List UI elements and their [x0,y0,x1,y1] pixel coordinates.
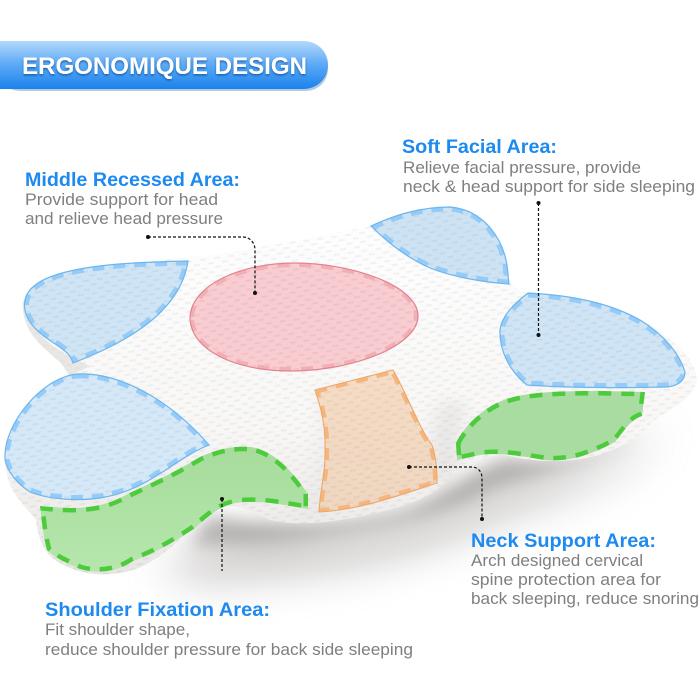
leader: shoulder fixation [220,497,224,571]
blue area: upper left wing [24,261,188,363]
blue area: soft facial right [500,293,685,388]
blue area: lower left wing [5,374,209,500]
header banner [0,41,328,91]
green area: shoulder fixation [40,447,308,572]
text block: shoulder fixation area: reduce shoulder pressure for back side sleeping [45,641,413,659]
pillow illustration [5,206,697,578]
text block: neck support area: Arch designed cervical [471,552,643,570]
banner title: ERGONOMIQUE DESIGN [22,53,307,80]
text block: shoulder fixation area: Shoulder Fixation Area: [45,600,270,621]
text block: middle recessed area: and relieve head pressure [25,210,223,228]
text block: soft facial area: neck & head support for side sleeping [403,178,695,196]
text block: neck support area: back sleeping, reduce snoring [471,590,699,608]
blue area: soft facial top [371,207,509,284]
pillow body [5,206,697,574]
leader: middle recessed [146,235,257,295]
text block: neck support area: spine protection area for [471,571,662,589]
text block: middle recessed area: Middle Recessed Area: [25,170,240,191]
pillow ground shadow [160,425,660,578]
text block: neck support area [471,531,699,608]
text block: soft facial area [402,137,695,196]
text block: soft facial area: Soft Facial Area: [402,137,557,158]
leader: neck support [407,465,484,521]
text block: soft facial area: Relieve facial pressure, provide [403,159,641,177]
green area: right arch [456,391,645,460]
leader: soft facial [536,201,540,337]
text block: shoulder fixation area [45,600,413,659]
text block: middle recessed area [25,170,240,228]
orange area: neck support [315,370,437,512]
text block: neck support area: Neck Support Area: [471,531,656,552]
pink area: middle recessed [190,263,418,371]
text block: shoulder fixation area: Fit shoulder shape, [45,621,190,639]
text block: middle recessed area: Provide support for head [25,191,218,209]
